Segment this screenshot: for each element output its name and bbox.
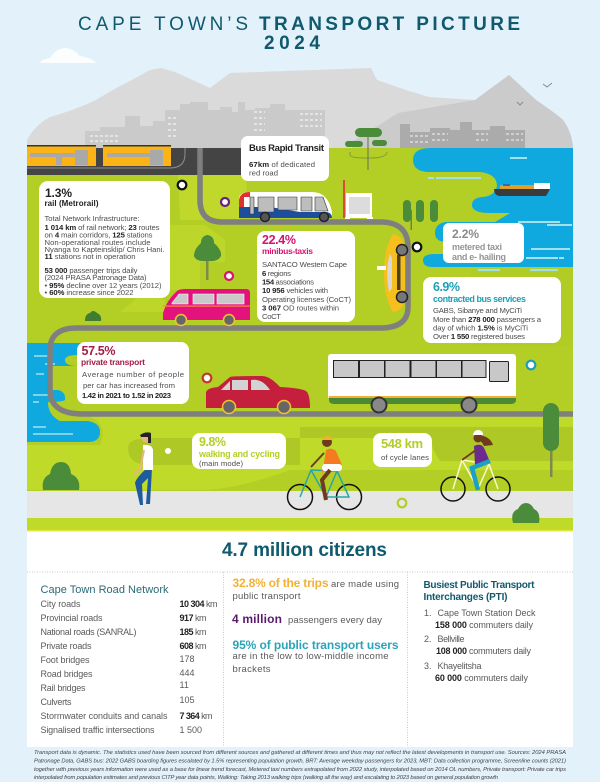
callout: contracted bus services: contracted bus services [433,294,526,304]
icon: BRT bus [239,192,332,222]
callout: Bus Rapid Transit: Bus Rapid Transit [249,143,325,154]
callout: contracted bus services: Over 1 550 registered buses [433,332,525,341]
table: Cape Town road network: 444 [180,668,195,678]
icon: metered taxi [377,234,408,312]
icon: bush right [512,503,539,523]
callout: minibus-taxis: 6 regions [262,269,291,278]
rail corridor [27,148,241,175]
icon: cloud [40,48,96,63]
statistics: public transport use: brackets [232,664,271,675]
callout: contracted bus services: GABS, Sibanye and MyCiTi [433,306,522,315]
callout: rail: 1.3% [45,186,72,200]
icon: minibus taxi [163,289,250,326]
list: busiest interchanges [424,580,536,683]
icon: tree [194,235,221,280]
land background [27,148,573,530]
title: CAPE TOWN’S [78,14,248,35]
list: busiest interchanges: Interchanges (PTI) [424,592,508,603]
statistics: public transport use: 32.8% of the trips [232,576,329,590]
list: busiest interchanges: 3. [424,661,432,671]
table: Cape Town road network: 608 km [180,641,206,651]
illustration: mountains and skyline [27,68,573,148]
icon: roadside tree [543,403,559,477]
water: river [27,343,100,442]
table: Cape Town road network: Provincial roads [40,613,103,623]
main road [50,148,573,414]
callout: metered taxi: and e- hailing [452,252,506,262]
table: Cape Town road network: 178 [180,654,195,664]
footnote: Transport data is dynamic. The statistics used have been sourced from different sources and gathered at different times and thus may not reflect the latest developments in transport use. Sources: 2024 PRASA [34,750,566,756]
callout: walking and cycling: 9.8% [199,435,226,449]
callout: rail: rail (Metrorail) [44,199,99,208]
title: TRANSPORT PICTURE [259,14,520,35]
callout: rail: 11 stations not in operation [44,252,136,261]
table: Cape Town road network: Cape Town Road Network [40,584,169,596]
footnote: Patronage Data, GABS bus: 2022 GABS boarding figures escalated by 1.5% representing population growth, BRT: Average weekday passengers for 2023, MBT: Data collection programme, Screenline counts (2021) [34,758,566,764]
list: busiest interchanges: 60 000 commuters daily [435,673,528,683]
callout: minibus-taxis: 3 067 OD routes within [262,304,339,312]
statistics: public transport use: 95% of public transport users [232,638,399,652]
callout: walking and cycling: walking and cycling [198,449,280,459]
callout: private transport: private transport [81,357,145,367]
icon: cyclist in orange [288,436,362,510]
icon: bush left [43,462,79,490]
callout: rail: 53 000 passenger trips daily [44,266,138,275]
statistics: public transport use: 4 million [232,612,282,626]
icon: birds [517,83,552,105]
callout: contracted bus services [423,277,561,343]
table: Cape Town road network: Culverts [40,697,72,707]
callout: minibus-taxis: CoCT [262,312,281,321]
list: busiest interchanges: Cape Town Station Deck [438,608,536,618]
list: busiest interchanges: 158 000 commuters daily [435,620,534,630]
callout: Bus Rapid Transit [241,136,329,181]
list: busiest interchanges: 108 000 commuters daily [436,646,532,656]
list: busiest interchanges: Busiest Public Transport [424,580,535,591]
lighter and darker land bands [27,175,573,530]
icon: cyclist in purple [441,430,510,501]
callout: metered taxi [443,223,524,263]
table: Cape Town road network: 10 304 km [180,599,218,609]
callout: private transport: 1.42 in 2021 to 1.52 in 2023 [82,391,171,400]
table: Cape Town road network: City roads [40,599,81,609]
callout: private transport: 57.5% [82,344,116,358]
table: Cape Town road network: National roads (SANRAL) [40,627,136,637]
list: busiest interchanges: Khayelitsha [438,661,482,671]
callout: rail: 1 014 km of rail network; 23 routes [44,223,160,232]
callout: metered taxi: metered taxi [452,242,502,252]
list: busiest interchanges: Bellville [438,634,464,644]
table: Cape Town road network: Signalised traffic intersections [40,725,155,735]
callout: minibus-taxis [257,231,355,322]
callout: cycle lanes: of cycle lanes [381,453,429,462]
title [78,14,520,54]
footpath [27,491,573,518]
callout: contracted bus services: More than 278 000 passengers a [433,315,542,324]
footnote [34,750,566,781]
statistics: public transport use: are in the low to low-middle income [232,651,388,662]
list: busiest interchanges: 1. [424,608,432,618]
table: Cape Town road network: 185 km [180,627,206,637]
callout: cycle lanes: 548 km [381,436,423,451]
callout: rail: • 95% decline over 12 years (2012) [44,281,162,290]
table: Cape Town road network: Private roads [40,641,92,651]
table: Cape Town road network: 7 364 km [180,711,212,721]
callout: contracted bus services: 6.9% [433,280,460,294]
icon: pedestrian [133,432,153,505]
icon: Metrorail train [27,145,171,166]
callout: private transport: per car has increased from [83,381,175,390]
table: Cape Town road network: 917 km [180,613,206,623]
callout: minibus-taxis: 22.4% [262,233,296,247]
list: busiest interchanges: 2. [424,634,432,644]
callout: rail: Non-operational routes include [44,238,150,247]
statistics: public transport use: passengers every day [288,615,382,626]
icon: ship [494,183,550,196]
icon: acacia tree [345,128,387,170]
callout: contracted bus services: day of which 1.5% is MyCiTi [433,324,528,332]
callout: minibus-taxis: SANTACO Western Cape [262,260,347,269]
callout: minibus-taxis: 10 956 vehicles with [262,286,328,295]
heading: population: 4.7 million citizens [222,540,387,561]
callout: private transport: Average number of people [82,370,184,379]
callout: walking and cycling: (main mode) [199,459,243,468]
icon: bus stop [343,180,373,219]
callout: rail: Total Network Infrastructure: [44,214,140,223]
callout: rail: • 60% increase since 2022 [44,288,134,297]
callout: Bus Rapid Transit: red road [249,168,278,178]
callout: rail: Nyanga to Kapteinsklip/ Chris Hani. [44,245,164,254]
table: Cape Town road network: 105 [180,695,195,705]
statistics: public transport use: public transport [232,591,301,602]
icon: small bush [85,311,101,321]
footnote: together with previous years information were used as a base for linear trend forecast, Metered taxi numbers extrapolated from 2022 study, interpolated based on 2014 OL numbers, Private transport: Private car trips [34,767,566,773]
callout: private transport [77,342,189,404]
icon: three cypress trees [403,200,438,230]
table: Cape Town road network: Road bridges [40,669,93,679]
table: Cape Town road network: 11 [180,680,189,690]
water: bay [413,148,573,270]
table: Cape Town road network: Foot bridges [40,655,90,665]
footnote: interpolated from population estimates and previous CITP year data points, Walking: Taking 2013 walking trips (walking all the way) and escalating to 2023 based on general population growth [34,775,498,781]
callout: rail: (2024 PRASA Patronage Data) [44,273,147,282]
callout: minibus-taxis: 154 associations [262,278,314,286]
statistics: public transport use: are made using [331,579,399,590]
icon: private car [206,376,310,414]
table: Cape Town road network: Rail bridges [40,683,86,693]
callout: minibus-taxis: Operating licenses (CoCT) [262,295,351,304]
panel: citizens and statistics [27,530,573,747]
statistics: public transport use [232,576,399,675]
table: Cape Town road network [40,584,218,735]
title: 2024 [264,33,320,54]
callout: metered taxi: 2.2% [452,227,479,241]
table: Cape Town road network: Stormwater conduits and canals [40,711,168,721]
icon: location rings [165,181,535,507]
callout: rail [39,181,170,298]
table: Cape Town road network: 1 500 [180,725,202,735]
callout: minibus-taxis: minibus-taxis [262,246,313,256]
callout: Bus Rapid Transit: 67km of dedicated [249,160,315,169]
callout: walking and cycling [192,433,286,469]
icon: contracted bus [328,354,516,412]
callout: cycle lanes [373,433,432,467]
callout: rail: on 4 main corridors, 125 stations [44,230,153,240]
